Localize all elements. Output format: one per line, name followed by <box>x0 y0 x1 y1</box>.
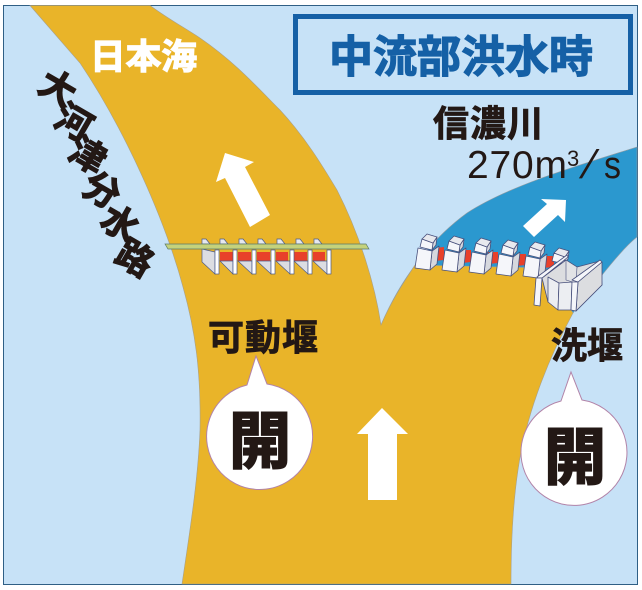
label: Okozu diversion channel: 大 <box>32 62 84 115</box>
arrow: main upward flow <box>357 408 408 500</box>
label: Okozu diversion channel: 路 <box>109 232 161 285</box>
label: washing weir: 洗堰 <box>551 325 623 366</box>
label: movable weir: 可動堰 <box>208 317 318 358</box>
Shinano weir <box>415 234 602 311</box>
gates <box>435 247 554 268</box>
label: Shinano River: 信濃川 <box>433 103 543 144</box>
pier 1 <box>415 234 439 270</box>
label: Okozu diversion channel <box>32 62 161 285</box>
pier 5 <box>523 242 547 278</box>
label: flow rate: 3 <box>567 146 579 171</box>
weir gates <box>220 252 325 261</box>
label: Okozu diversion channel: 津 <box>62 129 114 182</box>
title box: 中流部洪水時 <box>329 33 593 82</box>
callout: washing weir open: 開 <box>544 424 606 493</box>
label: Okozu diversion channel: 分 <box>76 164 128 217</box>
label: Okozu diversion channel: 河 <box>48 96 100 149</box>
pier 2 <box>442 236 466 272</box>
label: flow rate <box>467 142 621 187</box>
pier 3 <box>469 238 493 274</box>
callout: movable weir open: 開 <box>229 408 291 477</box>
river: Shinano blue channel <box>381 147 637 325</box>
callout: washing weir open <box>521 372 627 505</box>
label: flow rate: s <box>604 145 621 187</box>
washing weir <box>534 255 602 311</box>
weir bridge <box>165 244 369 249</box>
movable weir <box>165 239 369 274</box>
arrow: Shinano flow <box>523 199 566 237</box>
pier 4 <box>496 240 520 276</box>
weir piers <box>202 249 327 274</box>
label: flow rate: / <box>576 142 602 187</box>
label: flow rate: 270m <box>467 144 567 187</box>
pier 6 top block <box>552 248 569 264</box>
title box <box>296 16 630 92</box>
label: Okozu diversion channel: 水 <box>94 197 146 250</box>
arrow: main channel flow toward sea <box>216 153 270 227</box>
label: Sea of Japan: 日本海 <box>90 38 197 77</box>
callout: movable weir open <box>207 356 313 489</box>
